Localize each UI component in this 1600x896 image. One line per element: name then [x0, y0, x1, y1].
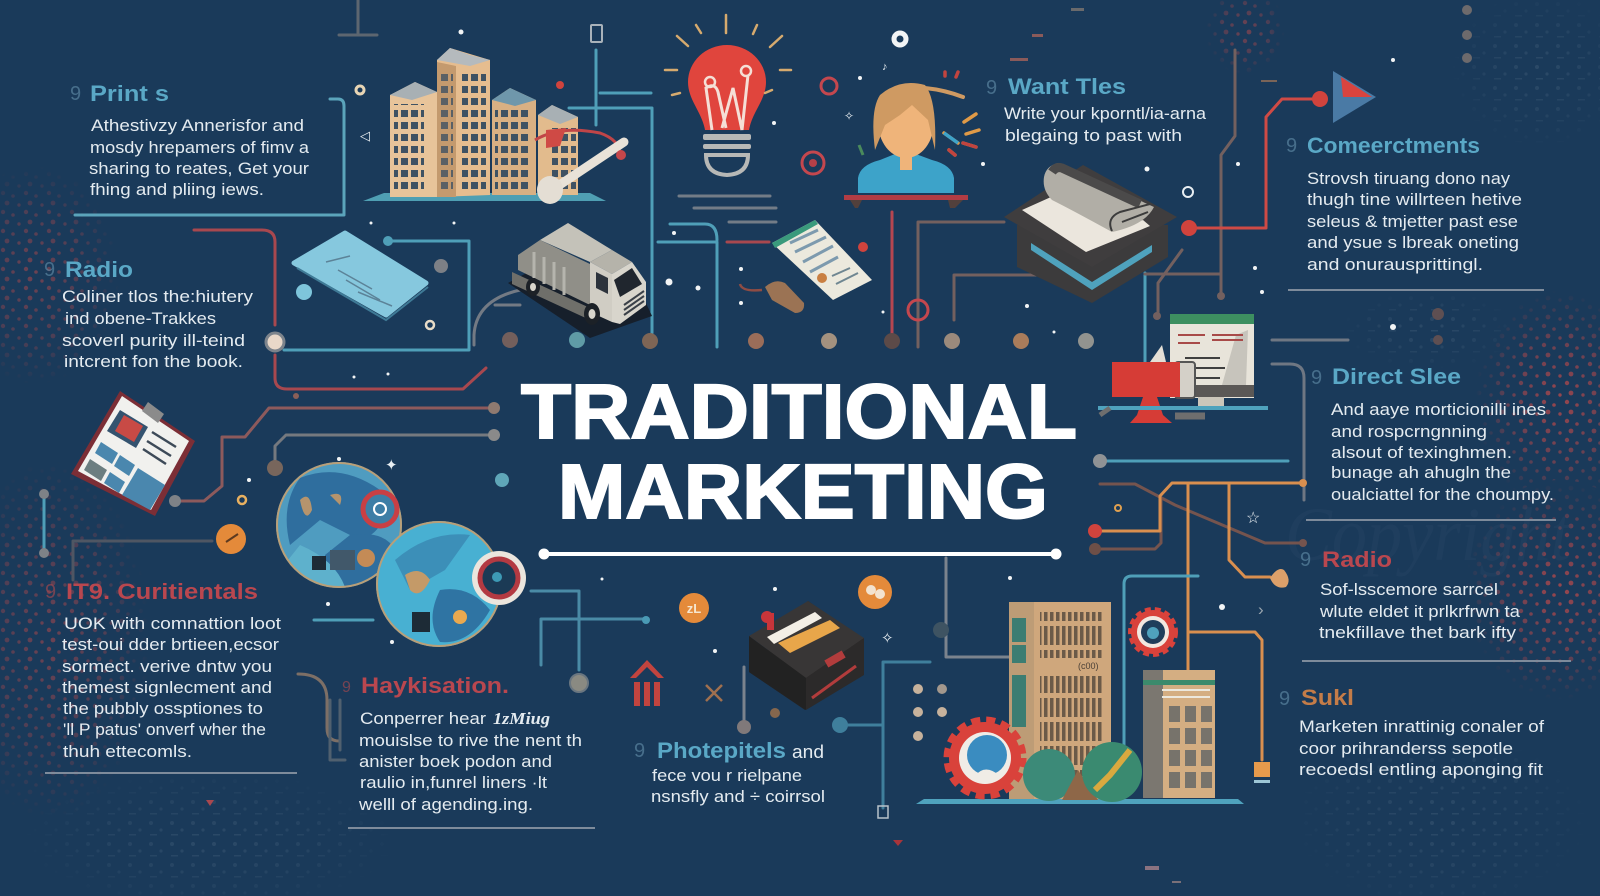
panel: IT9 Curitientals: UOK with comnattion loot: [64, 615, 281, 633]
panel: IT9 Curitientals: the pubbly ossptiones to: [63, 700, 263, 718]
connector: center-left teal: [531, 591, 646, 670]
small star icons: ◁: [360, 128, 370, 143]
panel: Haykisation: anister boek podon and: [359, 753, 552, 771]
connector: radio red line: [194, 230, 486, 389]
connector: right teal vertical: [1144, 273, 1146, 362]
connector: right teal horizontal: [1100, 460, 1288, 462]
panel: Radio left: 9: [44, 259, 55, 281]
panel: Direct Slee: bunage ah ahugln the: [1331, 464, 1511, 482]
panel: Sukl: 9: [1279, 688, 1290, 710]
illustration: lightbulb: [665, 15, 791, 175]
panel: Photepitels: 9: [634, 740, 645, 762]
connector: right gray: [1272, 340, 1348, 500]
faint watermark: Copyright: [1285, 493, 1572, 577]
panel: Print: Print s: [90, 81, 169, 106]
connector: teal to gear: [1124, 576, 1198, 780]
panel: Radio right: Radio: [1322, 547, 1392, 572]
panel: Radio right: wlute eldet it prlkrfrwn ta: [1319, 603, 1521, 621]
panel: IT9 Curitientals: 'll P patus' onverf wher the: [63, 721, 266, 739]
panel: Direct Slee: Direct Slee: [1332, 364, 1461, 389]
panel: Direct Slee: [1306, 364, 1556, 520]
panel: Photepitels: [634, 738, 825, 806]
illustration: monitor with window: [1098, 314, 1268, 423]
title: MARKETING: [558, 449, 1048, 535]
globe right: [376, 521, 526, 647]
panel: IT9 Curitientals: sormect. verive dntw you: [62, 658, 272, 676]
desk: [844, 195, 968, 200]
illustration: tower and gears: (c00): [1078, 661, 1099, 671]
connector: teal bar: [314, 618, 373, 622]
row of dots above title: [502, 332, 1094, 349]
connector: brown to printer: [918, 222, 1040, 347]
connector: person red vertical: [890, 212, 894, 335]
icon: small outline frame: [878, 806, 888, 818]
connector: print panel border: [75, 99, 344, 215]
bulb rays: [665, 15, 791, 95]
panel: Want Tles: Write your kporntl/ia-arna: [1004, 105, 1207, 123]
panel: Direct Slee: oualciattel for the choumpy.: [1331, 486, 1554, 504]
globe left: [276, 462, 402, 588]
icon: triangle: [1333, 71, 1376, 123]
badges: orange centre: zL: [687, 601, 701, 616]
connector: gray top-left post: [339, 0, 377, 35]
icon: device top: [591, 25, 602, 42]
panel: Want Tles: 9: [986, 77, 997, 99]
small star icons: ✧: [881, 630, 894, 647]
title: TRADITIONAL: [521, 369, 1077, 455]
illustration: globes: [276, 462, 526, 647]
gear with globe: [947, 720, 1023, 796]
illustration: delivery truck: [508, 223, 652, 338]
connector: brown diagonal: [1100, 484, 1303, 549]
illustration: hand tool: [740, 281, 804, 313]
panel: Comeerctments: Comeerctments: [1307, 133, 1480, 158]
connector: bottom left tan curve: [298, 674, 339, 741]
panel: Haykisation: 1zMiug: [493, 709, 550, 728]
panel: IT9 Curitientals: test-oui dder brtieen,ecsor: [62, 636, 280, 654]
connector: right brown: [1145, 50, 1235, 315]
title underline: [538, 548, 1062, 560]
side building: [1143, 670, 1215, 798]
illustration: document sheet: [772, 220, 872, 300]
panel: Radio left: ind obene-Trakkes: [65, 310, 216, 328]
connector: bottom left faint: [330, 700, 345, 760]
panel: Haykisation: 9: [342, 679, 351, 696]
connector: red stub: [727, 240, 769, 244]
small gear: [1130, 609, 1176, 655]
panel: Print: Athestivzy Annerisfor and: [91, 117, 304, 135]
icon: cross mark: [706, 685, 722, 701]
connector: title-left gray: [275, 435, 494, 468]
connector: red to triangle: [1189, 99, 1320, 228]
panel: IT9 Curitientals: IT9. Curitientals: [66, 579, 258, 604]
badge: orange left: [216, 524, 246, 554]
icon: orange blob: [1270, 569, 1289, 588]
accent dashes: [206, 8, 1277, 883]
panel: Radio left: Coliner tlos the:hiutery: [62, 288, 254, 306]
illustration: office buildings: [363, 48, 626, 204]
illustration: tablet: [294, 233, 428, 320]
connector: gray bars: [679, 196, 776, 222]
panel: Direct Slee: alsout of texinghmen.: [1331, 444, 1512, 462]
white sparkle dots: [247, 30, 1396, 653]
connector: left faint gray: [73, 541, 212, 580]
title: [521, 369, 1077, 560]
connector: orange network: [1100, 483, 1303, 760]
panel: Sukl: coor prihranderss sepotle: [1299, 740, 1513, 758]
panel: Comeerctments: and onurausprittingl.: [1307, 256, 1483, 274]
target badge: [472, 551, 526, 605]
panel: Comeerctments: thugh tine willrteen hetive: [1307, 191, 1522, 209]
panel: Comeerctments: 9: [1286, 135, 1297, 157]
panel: Haykisation: welll of agending.ing.: [358, 796, 533, 814]
panel: Haykisation: raulio in,funrel liners ·lt: [360, 774, 547, 792]
panel: Photepitels: fece vou r rielpane: [652, 767, 802, 785]
small star icons: [360, 61, 1264, 647]
panel: Direct Slee: and rospcrngnning: [1331, 423, 1487, 441]
panel: Radio left: intcrent fon the book.: [64, 353, 243, 371]
panel: Haykisation: [342, 673, 595, 828]
connector: lower teal: [840, 662, 930, 808]
connector: gray L to tower: [946, 558, 1010, 657]
illustration: tower and gears: [916, 602, 1244, 804]
connector: cash box post: [742, 667, 746, 725]
panel: Haykisation: Conperrer hear: [360, 710, 487, 728]
panel: Photepitels: Photepitels: [657, 738, 786, 763]
gear mark top: [894, 33, 906, 45]
panel: Print: 9: [70, 83, 81, 105]
panel: IT9 Curitientals: 9: [45, 581, 56, 603]
panel: Print: sharing to reates, Get your: [89, 160, 310, 178]
panel: Photepitels: nsnsfly and ÷ coirrsol: [651, 788, 825, 806]
icon: orange tag: [1254, 762, 1270, 783]
panel: Radio left: [44, 257, 254, 371]
small star icons: ›: [1258, 600, 1264, 619]
panel: Sukl: [1279, 685, 1544, 779]
panel: Radio right: 9: [1300, 549, 1311, 571]
connector: middle teal: [658, 224, 717, 347]
panel: Want Tles: Want Tles: [1008, 74, 1126, 99]
small star icons: ✦: [385, 457, 398, 474]
locator ring: [363, 492, 397, 526]
small star icons: ✧: [844, 109, 854, 123]
panel: Sukl: Sukl: [1301, 685, 1354, 710]
platform: [916, 799, 1244, 804]
panel: Comeerctments: and ysue s lbreak oneting: [1307, 234, 1519, 252]
panel: Radio right: tnekfillave thet bark ifty: [1319, 624, 1517, 642]
panel: Direct Slee: And aaye morticionilli ines: [1331, 401, 1546, 419]
panel: Radio right: Sof-lsscemore sarrcel: [1320, 581, 1498, 599]
panel: Photepitels: and: [792, 742, 824, 762]
connector: tablet teal loop: [284, 241, 469, 350]
circuit connector lines: [44, 0, 1348, 808]
panel: IT9 Curitientals: themest signlecment and: [62, 679, 272, 697]
panel: Radio right: [1300, 547, 1571, 661]
panel: Radio left: Radio: [65, 257, 133, 282]
panel: Want Tles: blegaing to past with: [1005, 127, 1182, 145]
illustration: clipboard: [71, 391, 195, 516]
illustration: person at desk: [844, 72, 979, 208]
panel: Comeerctments: Strovsh tiruang dono nay: [1307, 170, 1511, 188]
panel: Print: fhing and pliing iews.: [90, 181, 264, 199]
panel: Sukl: Marketen inrattinig conaler of: [1299, 718, 1544, 736]
panel: Direct Slee: 9: [1311, 367, 1322, 389]
badges: orange centre: [679, 575, 892, 623]
panel: Radio left: scoverl purity ill-teind: [62, 332, 245, 350]
panel: Want Tles: [986, 74, 1207, 145]
panel: Comeerctments: [1286, 133, 1544, 290]
panel: Comeerctments: seleus & tmjetter past ese: [1307, 213, 1518, 231]
icon: red column building: [630, 660, 664, 706]
panel: Print: mosdy hrepamers of fimv a: [90, 139, 310, 157]
panel: IT9 Curitientals: thuh ettecomls.: [63, 743, 192, 761]
panel: Haykisation: Haykisation.: [361, 673, 509, 698]
connector endpoints and small decorations: [39, 5, 1472, 741]
connector: left vertical teal: [42, 494, 46, 553]
panel: Print: [70, 81, 310, 199]
connector: top teal: [569, 50, 652, 333]
panel: Haykisation: mouislse to rive the nent th: [359, 732, 582, 750]
panel: Sukl: recoedsl entling aponging fit: [1299, 761, 1543, 779]
connector: truck gray arc: [474, 290, 520, 345]
small star icons: ♪: [882, 61, 888, 73]
illustration: open book on printer: [1004, 163, 1177, 303]
small star icons: ☆: [1246, 510, 1260, 527]
connector: title-left red: [175, 408, 494, 501]
illustration: cash box: [749, 601, 864, 710]
panel: IT9 Curitientals: [45, 579, 297, 773]
